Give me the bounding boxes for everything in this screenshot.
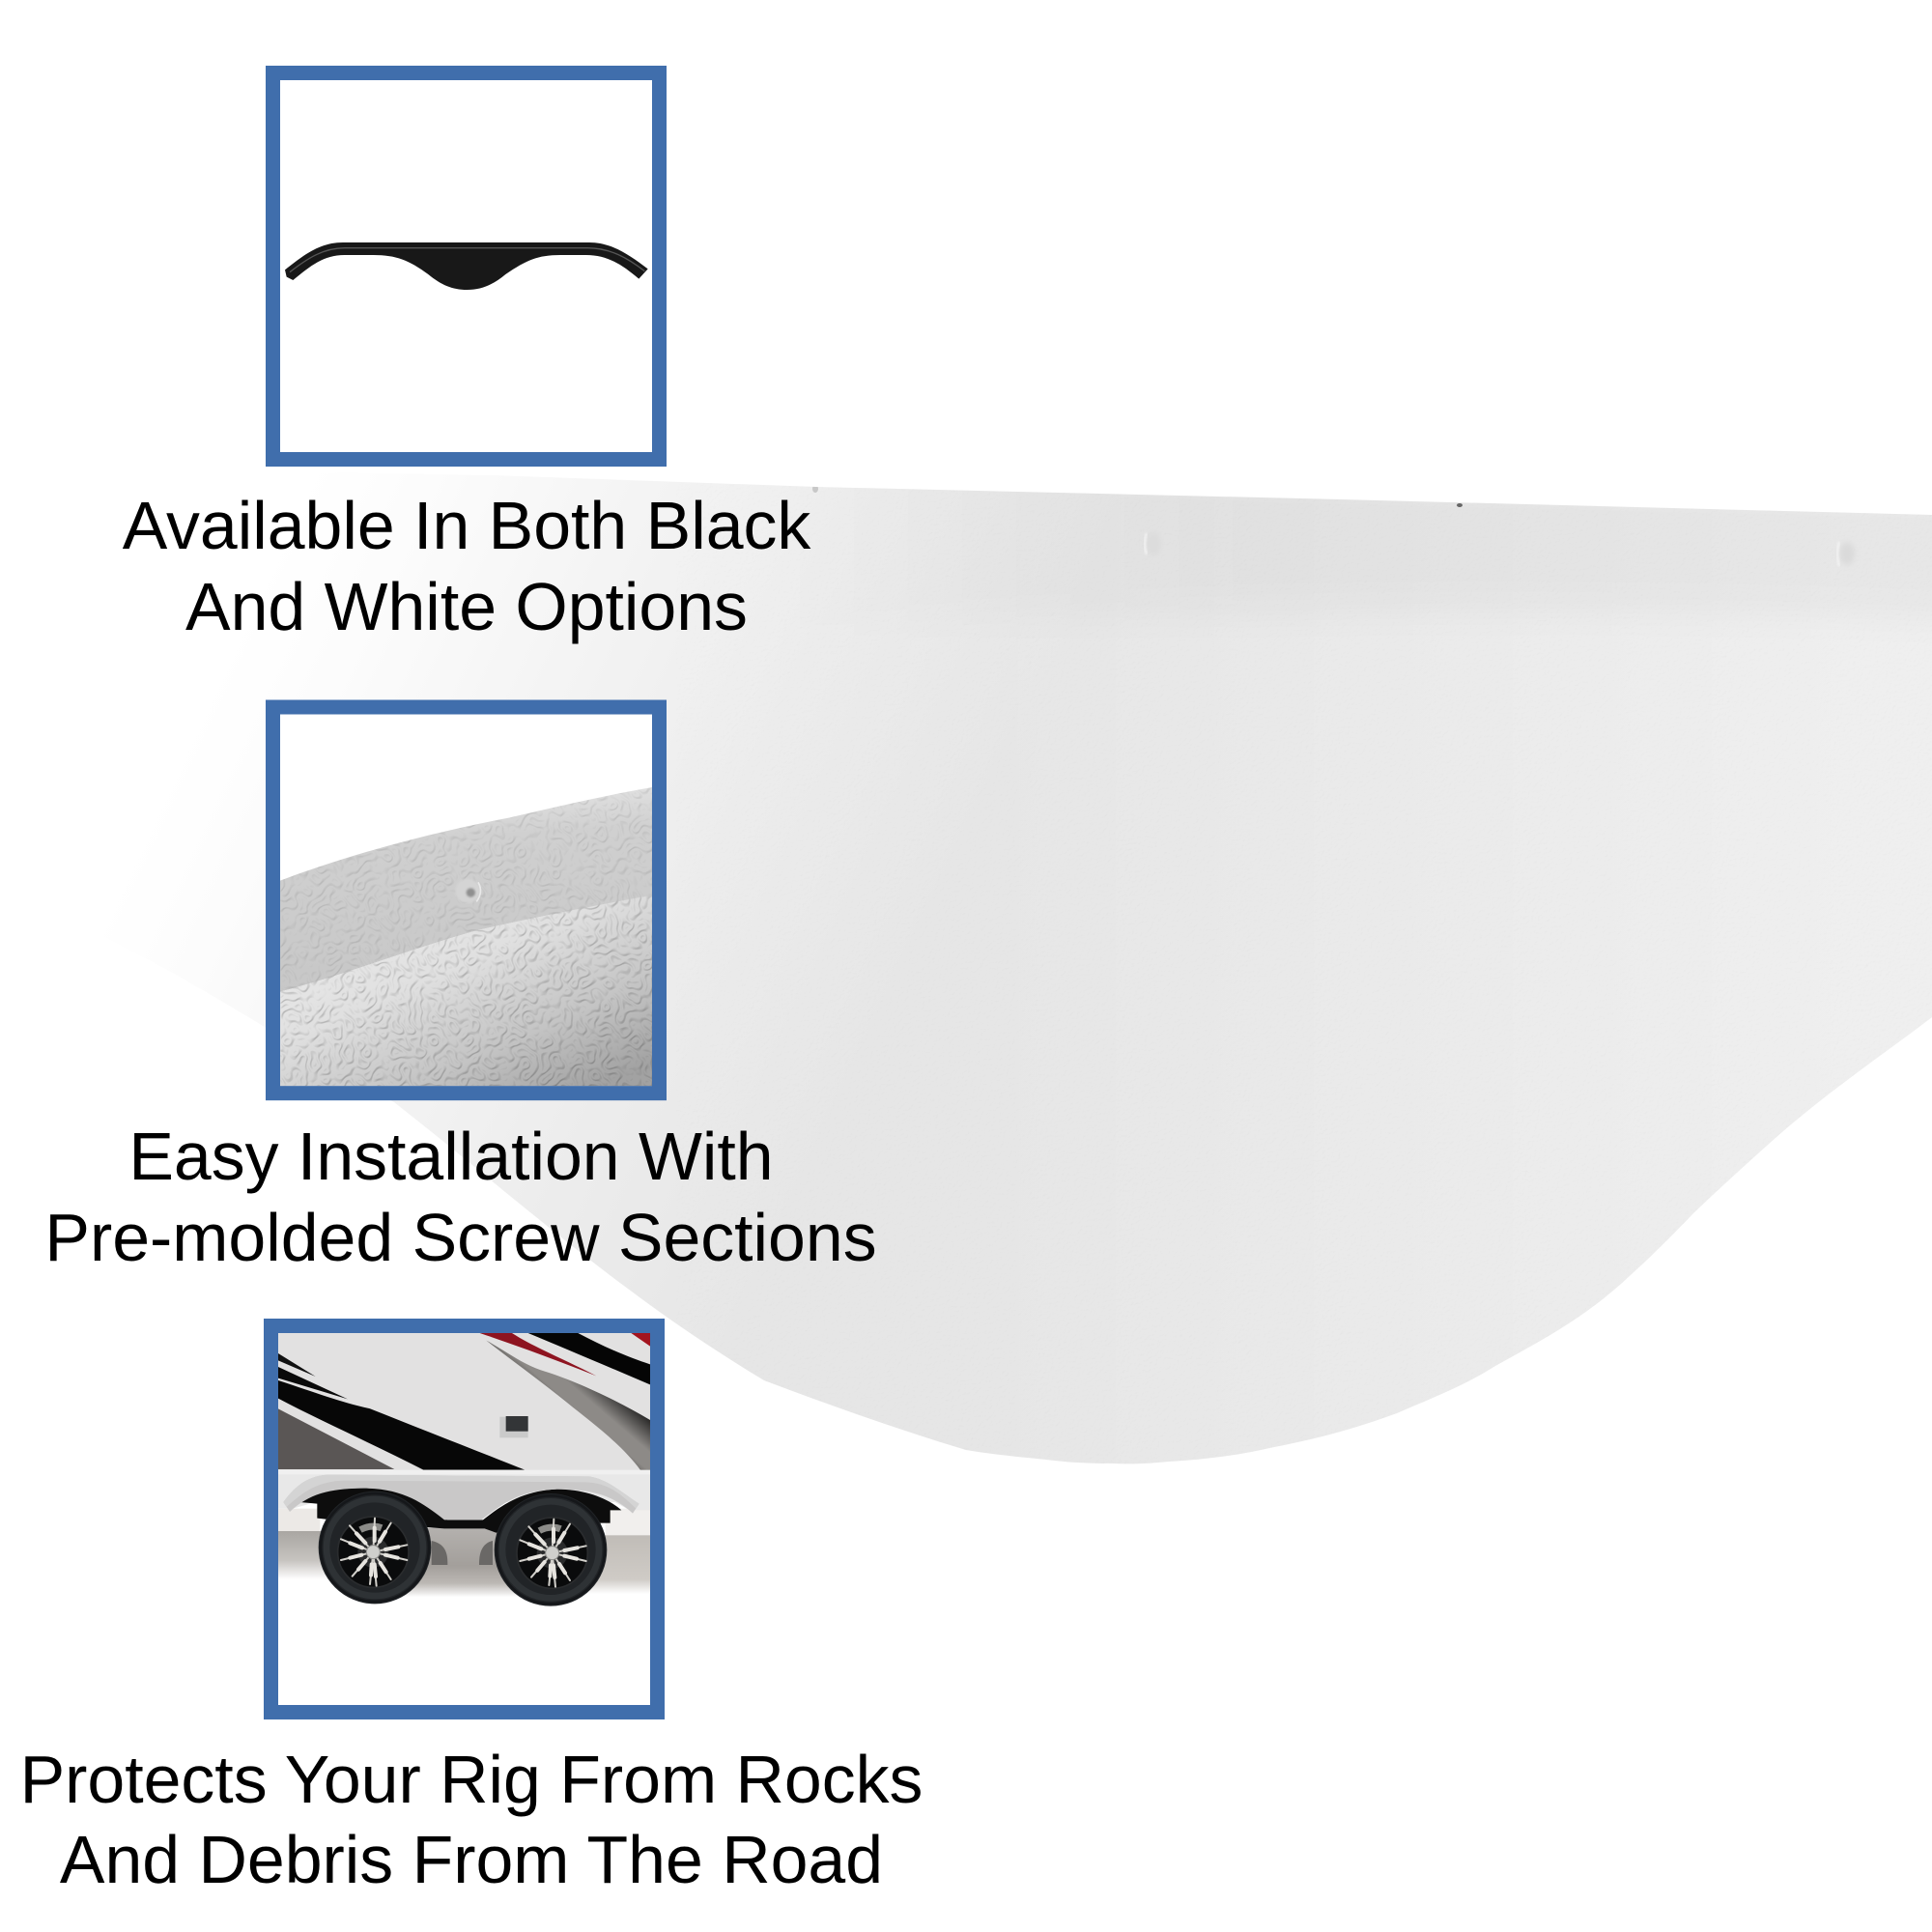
vent bbox=[499, 1417, 528, 1437]
caption line 2: black and white options: And White Options bbox=[185, 569, 748, 644]
panel: black and white options bbox=[272, 73, 659, 460]
grey graphic bbox=[278, 1408, 394, 1469]
caption: black and white options: Available In Both Black bbox=[123, 488, 810, 563]
caption: protects your rig: Protects Your Rig From Rocks bbox=[20, 1742, 923, 1817]
red stripe bbox=[480, 1333, 596, 1376]
wheel well and undercarriage bbox=[299, 1489, 621, 1533]
icon: black fender bbox=[285, 242, 648, 290]
fender skirt bbox=[283, 1475, 639, 1520]
trailer side wall bbox=[278, 1333, 650, 1471]
floor left bbox=[278, 1509, 320, 1533]
main fender skirt close-up bbox=[392, 478, 1932, 1464]
photo: textured fender bbox=[280, 715, 652, 1087]
black swoosh bbox=[278, 1380, 525, 1470]
surface grain bbox=[676, 483, 1932, 1468]
rear wheel bbox=[319, 1492, 431, 1604]
blue frame bbox=[272, 73, 659, 460]
photo: trailer and wheels bbox=[278, 1333, 650, 1606]
blue frame bbox=[272, 707, 659, 1094]
rivet mark left bbox=[812, 487, 818, 493]
floor right bbox=[606, 1509, 650, 1536]
fender lip bbox=[280, 784, 652, 997]
screw dimple bbox=[455, 879, 480, 903]
caption: easy installation: Easy Installation With bbox=[128, 1119, 774, 1194]
fender upper band bbox=[283, 1475, 639, 1509]
panel: trailer wheels bbox=[270, 1325, 657, 1712]
centre reflection right bbox=[479, 1541, 493, 1565]
upper lip shading bbox=[773, 464, 1932, 628]
centre reflection bbox=[432, 1541, 447, 1565]
caption line 2: protects your rig: And Debris From The Road bbox=[60, 1822, 883, 1897]
floor centre bbox=[406, 1528, 517, 1596]
lower panel bbox=[280, 894, 652, 1087]
skirt backing strip bbox=[278, 1474, 650, 1510]
blue frame bbox=[270, 1325, 657, 1712]
black stripe bbox=[528, 1333, 650, 1384]
screw dimple left bbox=[1144, 533, 1148, 554]
gradient swoosh bbox=[486, 1341, 650, 1470]
front wheel bbox=[495, 1493, 607, 1606]
screw dimple right bbox=[1837, 543, 1854, 564]
rivet mark right bbox=[1457, 503, 1463, 507]
caption line 2: easy installation: Pre-molded Screw Sections bbox=[44, 1200, 877, 1275]
panel: pre-molded screw sections bbox=[272, 707, 659, 1094]
upper trim bbox=[308, 1470, 650, 1472]
